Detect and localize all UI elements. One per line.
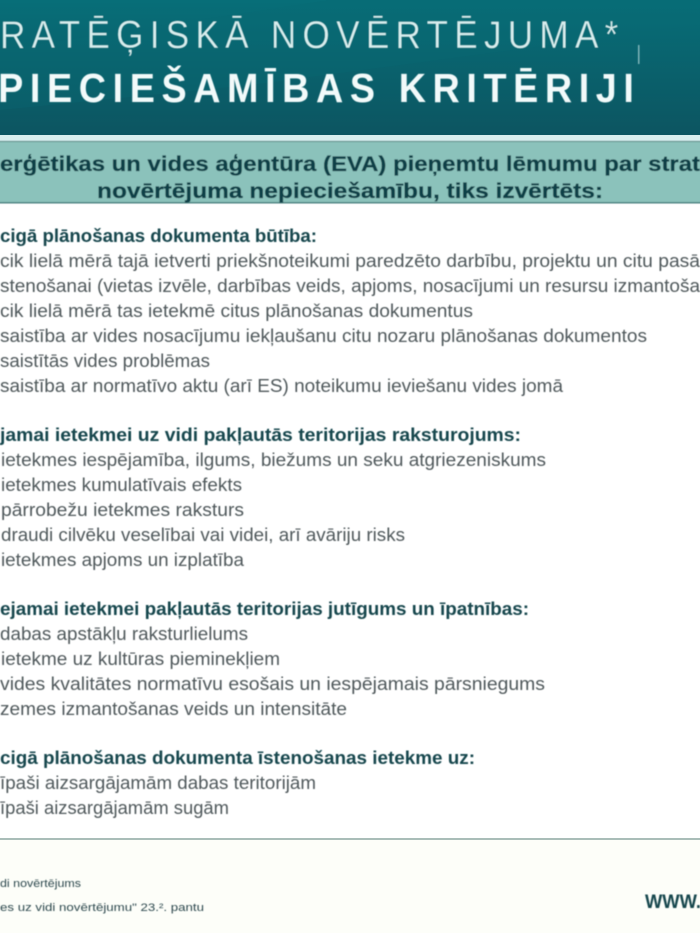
section: territory sensitivity: ietekme uz kultūras pieminekļiem	[1, 649, 280, 669]
section: impact characteristics: draudi cilvēku veselībai vai videi, arī avāriju risks	[1, 525, 405, 545]
section: document nature: saistība ar vides nosacījumu iekļaušanu citu nozaru plānošanas dokumentos	[0, 326, 647, 346]
section: document nature: stenošanai (vietas izvēle, darbības veids, apjoms, nosacījumi un resursu izmantoša	[0, 276, 700, 296]
title	[0, 12, 640, 111]
section: implementation impact: īpaši aizsargājamām dabas teritorijām	[0, 773, 316, 793]
footnotes	[0, 878, 204, 914]
section: document nature: cik lielā mērā tajā ietverti priekšnoteikumi paredzēto darbību, projektu un citu pasā	[0, 251, 700, 271]
section: impact characteristics: ietekmes kumulatīvais efekts	[1, 475, 242, 495]
section: document nature: saistītās vides problēmas	[0, 351, 210, 371]
header banner	[0, 0, 700, 141]
intro band: novērtējuma nepieciešamību, tiks izvērtēts:	[97, 180, 603, 203]
section: document nature: saistība ar normatīvo aktu (arī ES) noteikumu ieviešanu vides jomā	[0, 376, 564, 396]
section: implementation impact	[0, 748, 475, 818]
footer background	[0, 840, 700, 933]
footnotes: di novērtējums	[0, 878, 82, 890]
section: impact characteristics: ietekmes iespējamība, ilgums, biežums un seku atgriezeniskums	[1, 450, 546, 470]
section: impact characteristics: pārrobežu ietekmes raksturs	[1, 500, 244, 520]
section: document nature: cigā plānošanas dokumenta būtība:	[0, 226, 317, 246]
footer divider	[0, 838, 700, 840]
section: impact characteristics: jamai ietekmei uz vidi pakļautās teritorijas raksturojums:	[0, 425, 521, 445]
section: territory sensitivity: zemes izmantošanas veids un intensitāte	[0, 699, 347, 719]
section: territory sensitivity	[0, 599, 545, 719]
intro band	[0, 141, 700, 204]
section: document nature: cik lielā mērā tas ietekmē citus plānošanas dokumentus	[0, 301, 473, 321]
intro band: erģētikas un vides aģentūra (EVA) pieņemtu lēmumu par strat	[0, 153, 700, 176]
section: implementation impact: cigā plānošanas dokumenta īstenošanas ietekme uz:	[0, 748, 475, 768]
section: territory sensitivity: ejamai ietekmei pakļautās teritorijas jutīgums un īpatnības:	[0, 599, 529, 619]
section: impact characteristics: ietekmes apjoms un izplatība	[1, 550, 245, 570]
title: PIECIEŠAMĪBAS KRITĒRIJI	[0, 65, 634, 111]
section: implementation impact: īpaši aizsargājamām sugām	[0, 798, 229, 818]
title: RATĒĢISKĀ NOVĒRTĒJUMA*	[0, 12, 618, 56]
section: document nature	[0, 226, 700, 396]
section: territory sensitivity: dabas apstākļu raksturlielums	[0, 624, 248, 644]
section: impact characteristics	[0, 425, 546, 570]
footnotes: es uz vidi novērtējumu" 23.². pantu	[0, 902, 204, 914]
section: territory sensitivity: vides kvalitātes normatīvu esošais un iespējamais pārsniegums	[0, 674, 545, 694]
